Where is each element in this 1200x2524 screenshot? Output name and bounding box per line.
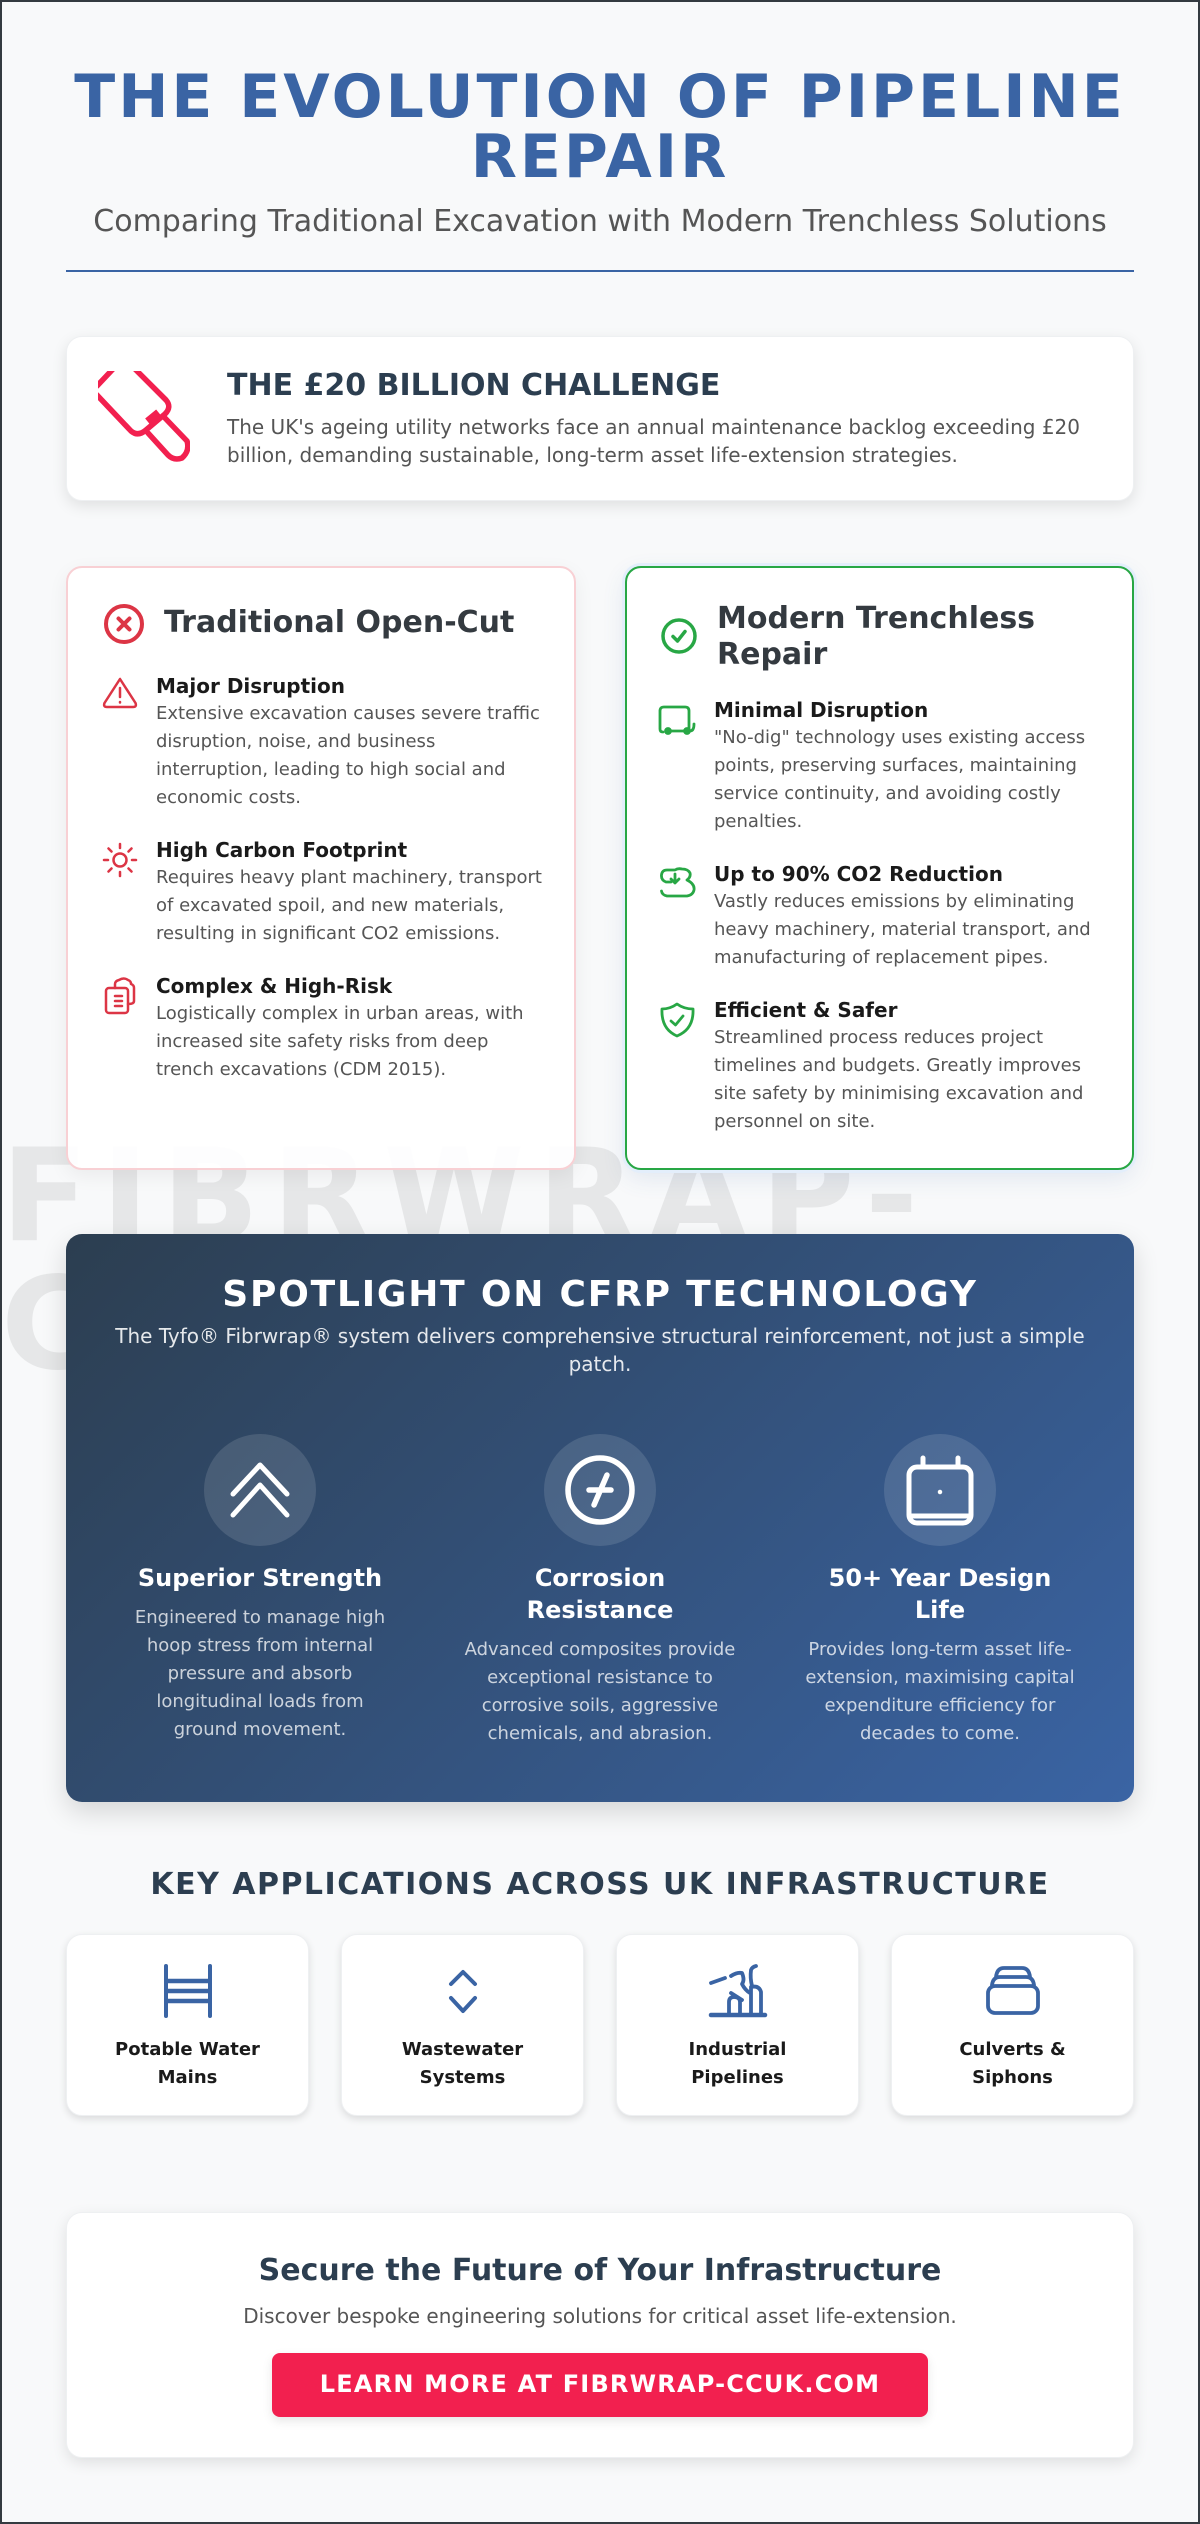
efficient text: timelines and budgets. Greatly improves xyxy=(714,1055,1081,1076)
efficient text: site safety by minimising excavation and xyxy=(714,1083,1083,1104)
corrosion text: corrosive soils, aggressive xyxy=(482,1695,718,1716)
watermark: CCUK xyxy=(1,1250,443,1399)
icon: cloud download xyxy=(660,867,696,898)
challenge text xyxy=(226,415,1080,467)
potable label: Mains xyxy=(158,2067,217,2088)
application cards xyxy=(64,1934,1136,2121)
panel: traditional open-cut xyxy=(66,566,576,1170)
co2 text xyxy=(714,891,1091,968)
icon: truck xyxy=(658,706,696,735)
design life text: expenditure efficiency for xyxy=(825,1695,1055,1716)
traditional heading: Traditional Open-Cut xyxy=(164,605,514,640)
icon: shield check xyxy=(660,1002,694,1038)
wastewater label: Wastewater xyxy=(402,2039,523,2060)
spotlight intro: The Tyfo® Fibrwrap® system delivers comprehensive structural reinforcement, not just a simple xyxy=(115,1324,1085,1348)
modern heading xyxy=(717,601,1035,672)
panel: call to action xyxy=(66,2212,1134,2458)
icon: check circle xyxy=(661,618,697,654)
title: REPAIR xyxy=(471,122,729,192)
subtitle: Comparing Traditional Excavation with Modern Trenchless Solutions xyxy=(93,204,1107,239)
design life title xyxy=(829,1564,1051,1624)
co2 title: Up to 90% CO2 Reduction xyxy=(714,862,1003,886)
watermark: FIBRWRAP- xyxy=(1,1122,931,1271)
item: major disruption xyxy=(102,674,540,808)
card: culverts and siphons xyxy=(891,1934,1134,2116)
item: efficient and safer xyxy=(660,998,1083,1132)
superior strength text: longitudinal loads from xyxy=(156,1691,364,1712)
icon: calendar xyxy=(884,1434,996,1546)
item: complex and high-risk xyxy=(104,974,524,1080)
icon: double chevron xyxy=(204,1434,316,1546)
icon: cross circle xyxy=(104,604,144,644)
header rule xyxy=(66,270,1134,272)
icon: clipboard xyxy=(104,977,136,1014)
cta text: Discover bespoke engineering solutions for critical asset life-extension. xyxy=(243,2304,957,2328)
potable label: Potable Water xyxy=(115,2039,260,2060)
corrosion text: exceptional resistance to xyxy=(487,1667,713,1688)
challenge text: The UK's ageing utility networks face an annual maintenance backlog exceeding £20 xyxy=(227,415,1080,439)
feature: superior strength xyxy=(135,1434,385,1740)
wastewater label xyxy=(342,2036,583,2092)
co2 text: manufacturing of replacement pipes. xyxy=(714,947,1048,968)
industrial label xyxy=(617,2036,858,2092)
high carbon title: High Carbon Footprint xyxy=(156,838,407,862)
minimal disruption text: points, preserving surfaces, maintaining xyxy=(714,755,1077,776)
major disruption text: economic costs. xyxy=(156,787,301,808)
complex text: Logistically complex in urban areas, with xyxy=(156,1003,524,1024)
co2 text: Vastly reduces emissions by eliminating xyxy=(714,891,1074,912)
superior strength text: ground movement. xyxy=(174,1719,346,1740)
panel: spotlight on CFRP technology xyxy=(66,1234,1134,1802)
high carbon text: resulting in significant CO2 emissions. xyxy=(156,923,500,944)
major disruption text: Extensive excavation causes severe traffic xyxy=(156,703,540,724)
icon: industrial plant xyxy=(690,1950,790,2030)
corrosion text: chemicals, and abrasion. xyxy=(488,1723,712,1744)
card: wastewater systems xyxy=(341,1934,584,2116)
efficient title: Efficient & Safer xyxy=(714,998,897,1022)
culverts label: Siphons xyxy=(972,2067,1053,2088)
applications heading: KEY APPLICATIONS ACROSS UK INFRASTRUCTURE xyxy=(150,1867,1050,1902)
spotlight intro xyxy=(115,1324,1085,1376)
item: minimal disruption xyxy=(658,698,1085,832)
superior strength text xyxy=(135,1607,385,1740)
corrosion title xyxy=(527,1564,673,1624)
design life title: Life xyxy=(915,1596,965,1624)
complex text xyxy=(156,1003,524,1080)
superior strength text: hoop stress from internal xyxy=(147,1635,373,1656)
efficient text: personnel on site. xyxy=(714,1111,875,1132)
superior strength title: Superior Strength xyxy=(138,1564,382,1592)
high carbon text xyxy=(156,867,542,944)
co2 text: heavy machinery, material transport, and xyxy=(714,919,1091,940)
efficient text xyxy=(714,1027,1083,1132)
design life text: extension, maximising capital xyxy=(805,1667,1075,1688)
potable label xyxy=(115,2039,260,2088)
feature: corrosion resistance xyxy=(464,1434,735,1744)
minimal disruption text: "No-dig" technology uses existing access xyxy=(714,727,1085,748)
feature: 50+ year design life xyxy=(805,1434,1075,1744)
high carbon text: Requires heavy plant machinery, transport xyxy=(156,867,542,888)
corrosion text xyxy=(464,1639,735,1744)
complex text: increased site safety risks from deep xyxy=(156,1031,488,1052)
panel: £20 billion challenge xyxy=(66,336,1134,501)
corrosion title: Resistance xyxy=(527,1596,673,1624)
culverts label: Culverts & xyxy=(959,2039,1066,2060)
design life text: decades to come. xyxy=(860,1723,1020,1744)
minimal disruption text xyxy=(714,727,1085,832)
corrosion title: Corrosion xyxy=(535,1564,665,1592)
icon: pipe xyxy=(98,371,190,462)
major disruption text: disruption, noise, and business xyxy=(156,731,435,752)
item: co2 reduction xyxy=(660,862,1091,968)
major disruption text xyxy=(156,703,540,808)
icon: warning triangle xyxy=(102,678,138,708)
superior strength text: pressure and absorb xyxy=(168,1663,352,1684)
minimal disruption text: service continuity, and avoiding costly xyxy=(714,783,1061,804)
watermark xyxy=(1,1122,931,1399)
high carbon text: of excavated spoil, and new materials, xyxy=(156,895,504,916)
superior strength text: Engineered to manage high xyxy=(135,1607,385,1628)
icon: sun xyxy=(102,842,138,878)
spotlight heading: SPOTLIGHT ON CFRP TECHNOLOGY xyxy=(222,1274,978,1315)
cta button: LEARN MORE AT FIBRWRAP-CCUK.COM xyxy=(320,2370,880,2398)
industrial label: Pipelines xyxy=(691,2067,784,2088)
panel: modern trenchless repair xyxy=(625,566,1134,1170)
design life text xyxy=(805,1639,1075,1744)
icon: not equal circle xyxy=(544,1434,656,1546)
icon: stacked culvert xyxy=(960,1950,1060,2030)
corrosion text: Advanced composites provide xyxy=(465,1639,735,1660)
industrial label: Industrial xyxy=(689,2039,786,2060)
design life title: 50+ Year Design xyxy=(829,1564,1051,1592)
icon: up down chevrons xyxy=(438,1963,488,2019)
challenge heading: THE £20 BILLION CHALLENGE xyxy=(227,368,720,403)
minimal disruption title: Minimal Disruption xyxy=(714,698,928,722)
design life text: Provides long-term asset life- xyxy=(808,1639,1072,1660)
major disruption title: Major Disruption xyxy=(156,674,345,698)
title: THE EVOLUTION OF PIPELINE xyxy=(74,62,1126,132)
complex title: Complex & High-Risk xyxy=(156,974,392,998)
icon: ladder xyxy=(164,1964,212,2018)
spotlight intro: patch. xyxy=(569,1352,631,1376)
header xyxy=(66,62,1134,272)
major disruption text: interruption, leading to high social and xyxy=(156,759,506,780)
challenge text: billion, demanding sustainable, long-term asset life-extension strategies. xyxy=(227,443,958,467)
card: potable water mains xyxy=(66,1934,309,2116)
modern heading: Modern Trenchless xyxy=(717,601,1035,636)
cta heading: Secure the Future of Your Infrastructure xyxy=(259,2253,941,2288)
modern heading: Repair xyxy=(717,637,827,672)
minimal disruption text: penalties. xyxy=(714,811,802,832)
wastewater label: Systems xyxy=(420,2067,505,2088)
complex text: trench excavations (CDM 2015). xyxy=(156,1059,446,1080)
efficient text: Streamlined process reduces project xyxy=(714,1027,1043,1048)
culverts label xyxy=(892,2036,1133,2092)
item: high carbon footprint xyxy=(102,838,542,944)
cta button xyxy=(272,2353,928,2417)
card: industrial pipelines xyxy=(616,1934,859,2116)
title xyxy=(74,62,1126,192)
